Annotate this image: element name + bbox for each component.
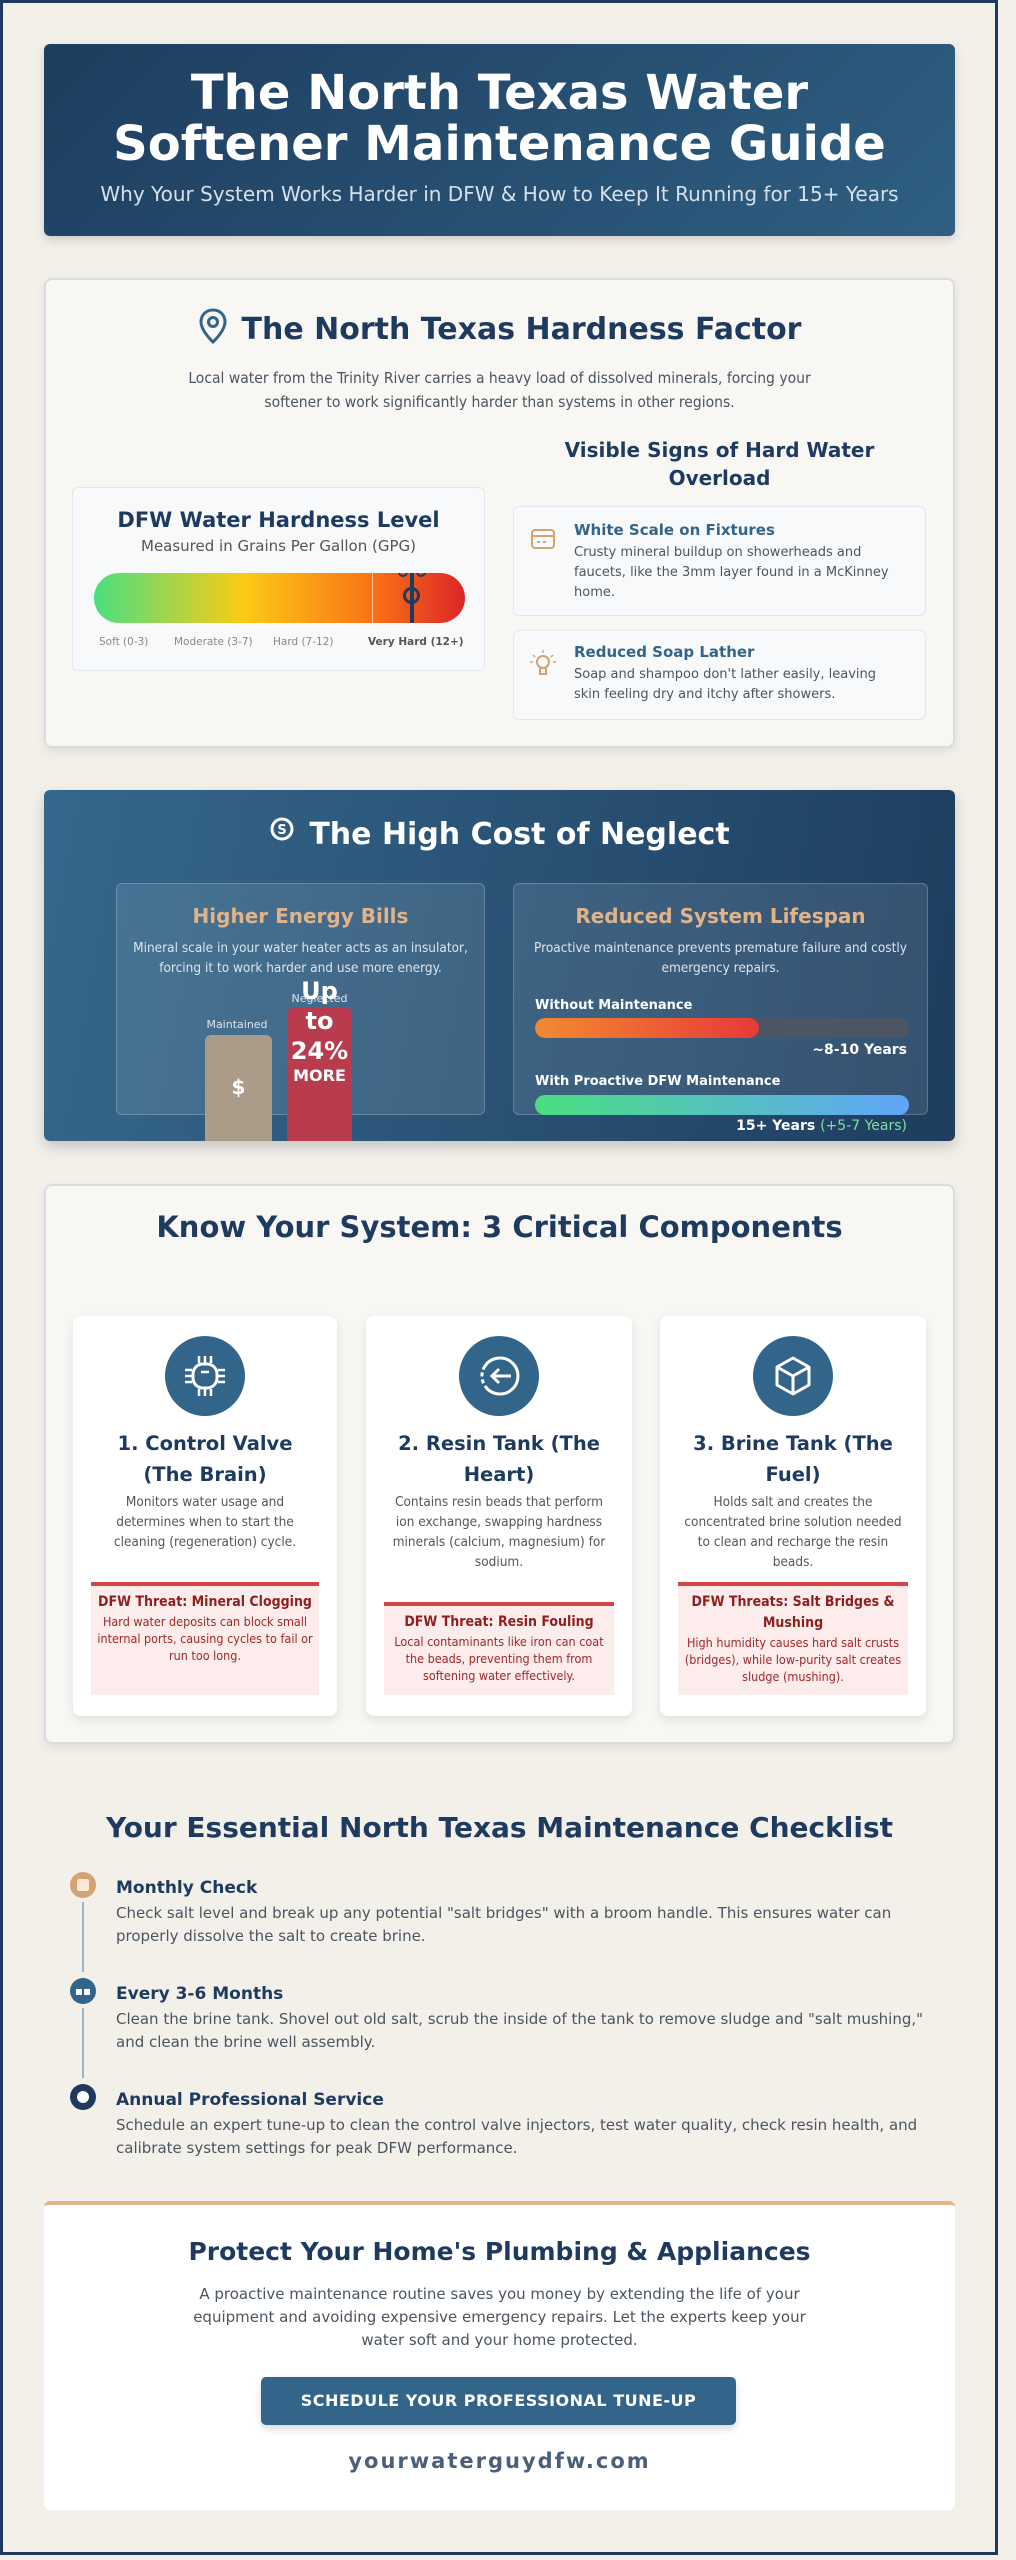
bar chart: 24% (291, 1037, 348, 1065)
sub-panel: lifespan: Reduced System Lifespan (575, 904, 866, 928)
sign: soap lather: Soap and shampoo don't lather easily, leaving skin feeling dry and itchy after showers. (574, 667, 876, 702)
checklist timeline: Schedule an expert tune-up to clean the control valve injectors, test water quality, check resin health, and calibrate system settings for peak DFW performance. (116, 2116, 917, 2157)
icon: chip (165, 1336, 245, 1416)
checklist heading: Your Essential North Texas Maintenance Checklist (106, 1811, 893, 1844)
sub-panel: lifespan: With Proactive DFW Maintenance (535, 1074, 780, 1089)
gradient bar (94, 573, 465, 623)
threat box: High humidity causes hard salt crusts (bridges), while low-purity salt creates sludge (mushing). (685, 1635, 901, 1684)
sub-panel: energy bills: Mineral scale in your water heater acts as an insulator, forcing it to work harder and use more energy. (133, 940, 468, 976)
icon: card (531, 529, 555, 549)
sub-panel: lifespan (513, 883, 928, 1115)
text: 15+ Years (+5-7 Years) (736, 1118, 907, 1134)
sub-panel: lifespan: ~8-10 Years (812, 1042, 907, 1058)
subtitle: Why Your System Works Harder in DFW & How to Keep It Running for 15+ Years (100, 182, 899, 206)
bar chart: MORE (293, 1066, 346, 1085)
card: control valve: (The Brain) (143, 1463, 267, 1486)
checklist timeline: Check salt level and break up any potential "salt bridges" with a broom handle. This ensures water can properly dissolve the salt to create brine. (116, 1904, 891, 1945)
title (113, 65, 886, 172)
item: monthly (70, 1872, 891, 1945)
card: resin tank (366, 1316, 632, 1716)
threat box: DFW Threat: Resin Fouling (404, 1614, 594, 1630)
card: brine tank: 3. Brine Tank (The (693, 1432, 893, 1455)
sign: soap lather: Reduced Soap Lather (574, 643, 754, 661)
panel: high cost of neglect (44, 790, 955, 1141)
checklist timeline (70, 1872, 923, 2157)
sub-panel: energy bills: Higher Energy Bills (193, 904, 408, 928)
checklist timeline: Clean the brine tank. Shovel out old salt, scrub the inside of the tank to remove sludge and "salt mushing," and clean the brine well assembly. (116, 2010, 923, 2051)
sign: white scale: White Scale on Fixtures (574, 521, 775, 539)
threat box: Local contaminants like iron can coat the beads, preventing them from softening water effectively. (394, 1634, 604, 1683)
gauge card: Moderate (3-7) (174, 636, 253, 648)
intro text: Local water from the Trinity River carries a heavy load of dissolved minerals, forcing your softener to work significantly harder than systems in other regions. (188, 369, 811, 411)
icon: cycle arrow (459, 1336, 539, 1416)
gauge card (72, 487, 485, 671)
heading: The High Cost of Neglect (309, 817, 730, 852)
panel: hardness factor (44, 278, 955, 748)
threat box: Hard water deposits can block small internal ports, causing cycles to fail or run too long. (97, 1614, 313, 1663)
title: Softener Maintenance Guide (113, 116, 886, 172)
signs heading (564, 438, 874, 490)
threat box (91, 1582, 319, 1695)
bar chart (205, 977, 352, 1141)
card: brine tank: Fuel) (765, 1463, 821, 1486)
signs heading: Overload (669, 466, 770, 490)
gauge card: Very Hard (12+) (368, 636, 464, 648)
checklist timeline: Annual Professional Service (116, 2090, 384, 2110)
lifespan bars: Without Maintenance (535, 998, 692, 1013)
panel: components (44, 1184, 955, 1744)
threat box (384, 1602, 614, 1695)
gauge card: Hard (7-12) (273, 636, 334, 648)
sub-panel: lifespan: Proactive maintenance prevents premature failure and costly emergency repairs. (534, 940, 907, 976)
card: control valve: 1. Control Valve (118, 1432, 292, 1455)
header banner (44, 44, 955, 236)
sign: soap lather (513, 630, 926, 720)
CTA text: A proactive maintenance routine saves you money by extending the life of your equipment and avoiding expensive emergency repairs. Let the experts keep your water soft and your home protected. (193, 2285, 806, 2349)
checklist timeline: ▪▪ (75, 1984, 91, 1998)
signs heading: Visible Signs of Hard Water (565, 438, 874, 462)
card: resin tank: 2. Resin Tank (The (398, 1432, 600, 1455)
scale labels: Soft (0-3) (99, 636, 148, 648)
bar chart: Maintained (206, 1018, 268, 1031)
threat box: DFW Threat: Mineral Clogging (98, 1594, 312, 1610)
bar chart: $ (232, 1075, 245, 1099)
gauge card: Measured in Grains Per Gallon (GPG) (141, 537, 416, 555)
CTA panel (44, 2201, 955, 2510)
heading: Know Your System: 3 Critical Components (156, 1210, 843, 1244)
bar chart: Up (301, 977, 338, 1005)
card: brine tank: Holds salt and creates the concentrated brine solution needed to clean and recharge the resin beads. (684, 1494, 902, 1570)
heading: S (278, 823, 287, 838)
icon: bulb (530, 650, 556, 675)
bar chart: to (306, 1007, 333, 1035)
card: control valve: Monitors water usage and determines when to start the cleaning (regeneration) cycle. (114, 1494, 296, 1550)
button: SCHEDULE YOUR PROFESSIONAL TUNE-UP (301, 2391, 696, 2410)
sign: white scale: Crusty mineral buildup on showerheads and faucets, like the 3mm layer found in a McKinney home. (574, 545, 889, 600)
item: annual (70, 2084, 917, 2157)
bar chart: Neglected (292, 992, 347, 1005)
heading with pin icon: The North Texas Hardness Factor (242, 312, 801, 347)
threat box: DFW Threats: Salt Bridges & Mushing (692, 1594, 894, 1631)
card: resin tank: Heart) (464, 1463, 534, 1486)
CTA heading: Protect Your Home's Plumbing & Appliances (188, 2237, 811, 2266)
sub-panel: energy bills (116, 883, 485, 1115)
button (261, 2377, 736, 2425)
item: 3-6 months (70, 1978, 923, 2051)
card: control valve (73, 1316, 337, 1716)
sign: white scale (513, 506, 926, 616)
threat box (678, 1582, 908, 1695)
title: The North Texas Water (191, 65, 808, 121)
checklist timeline: Monthly Check (116, 1878, 257, 1898)
card: resin tank: Contains resin beads that perform ion exchange, swapping hardness minerals (calcium, magnesium) for sodium. (393, 1494, 605, 1570)
gauge title: DFW Water Hardness Level (117, 508, 440, 532)
icon: box (753, 1336, 833, 1416)
website url: yourwaterguydfw.com (348, 2449, 651, 2473)
checklist timeline: Every 3-6 Months (116, 1984, 283, 2004)
card: brine tank (660, 1316, 926, 1716)
